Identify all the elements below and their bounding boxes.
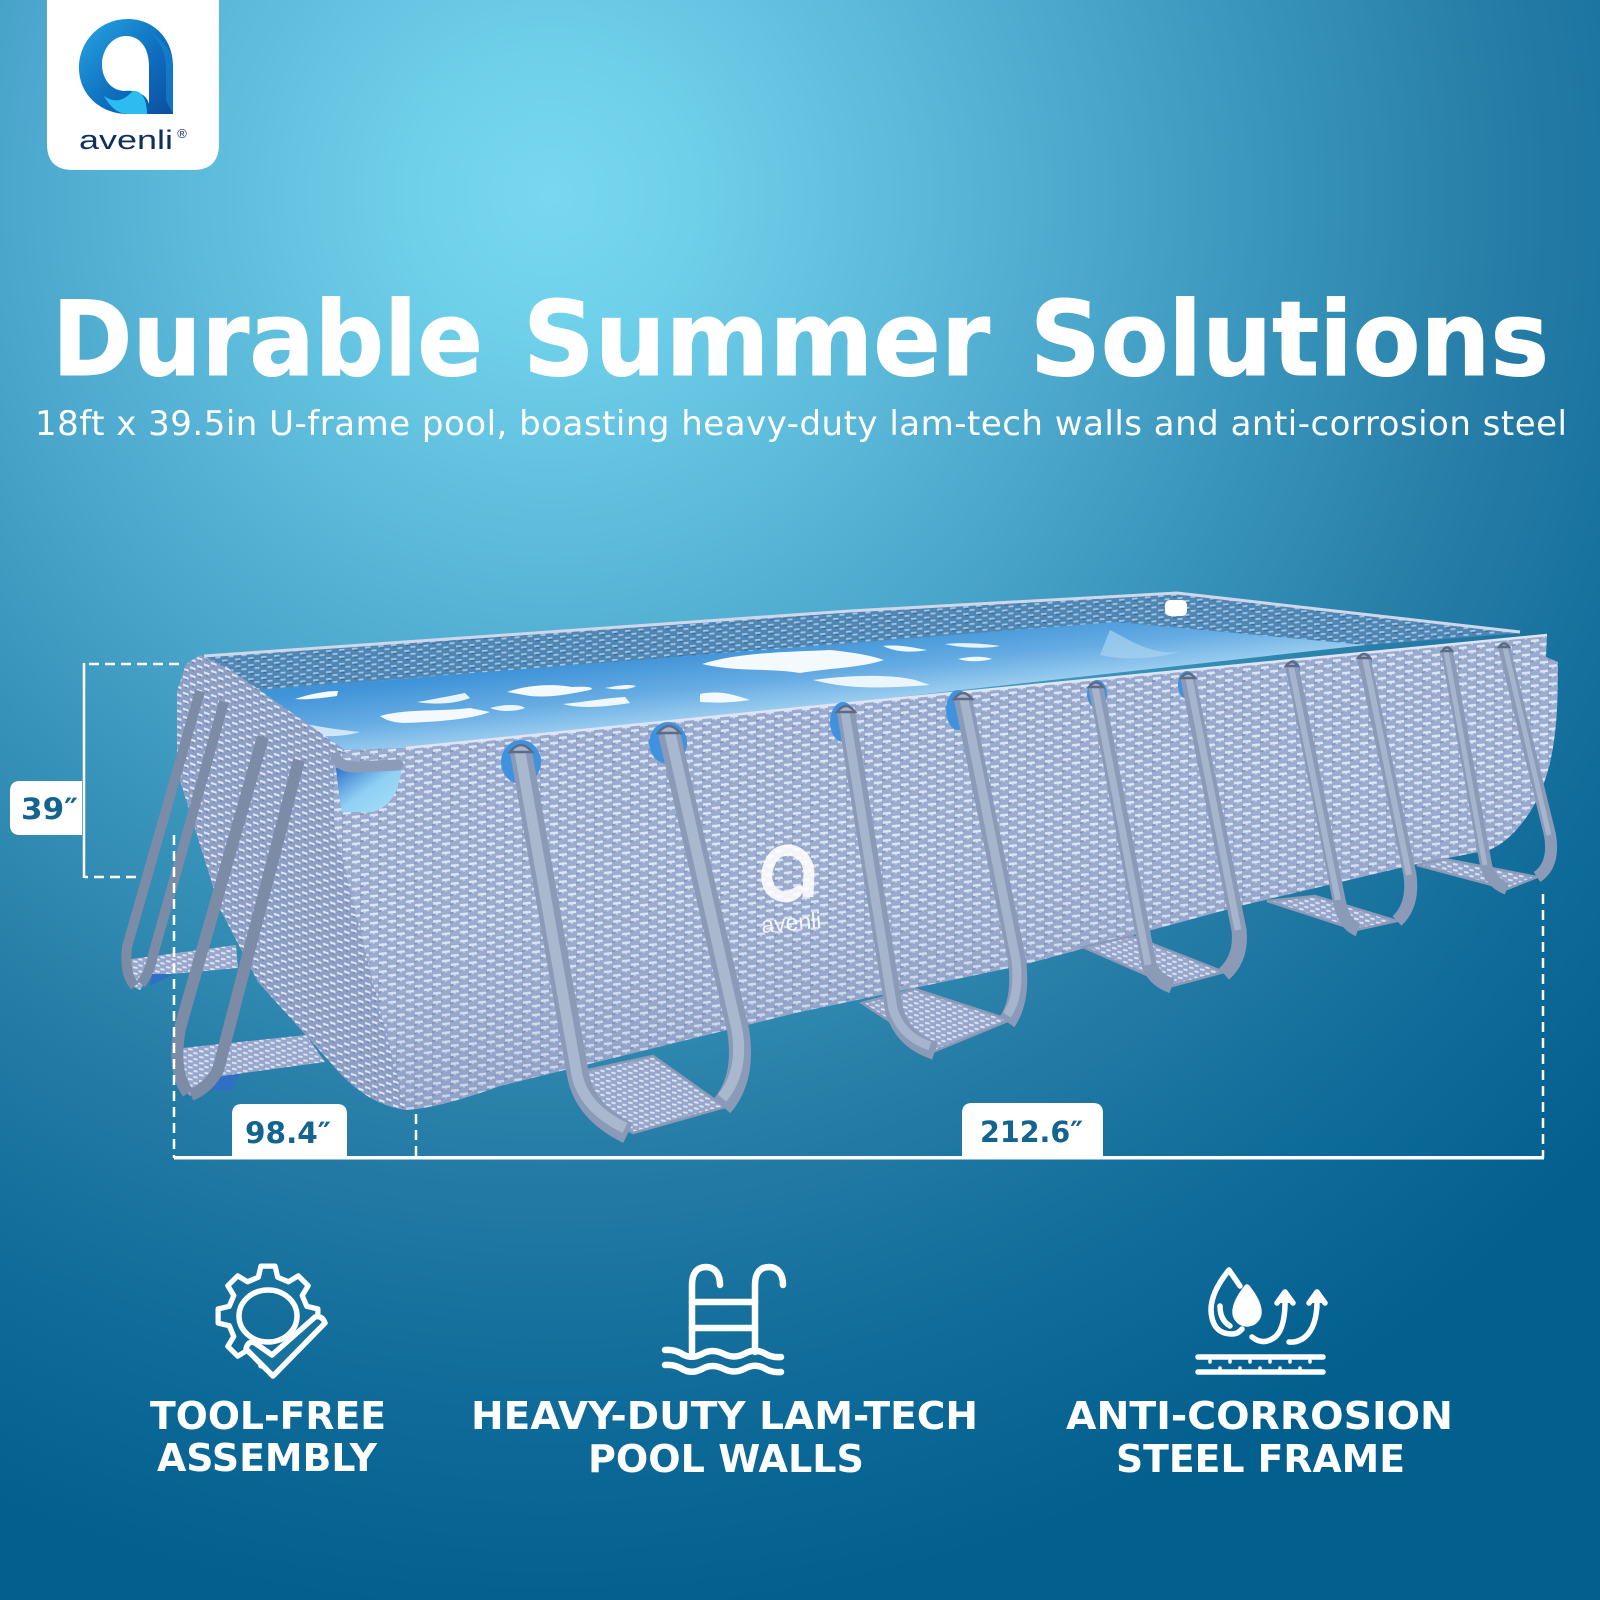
logo panel: [47, 0, 219, 170]
corner elbow pipe: [336, 758, 398, 767]
width and length dimension lines: [174, 835, 1544, 1160]
label: TOOL-FREE: [150, 1394, 386, 1438]
leg caps: [510, 644, 1509, 752]
height label: 39″: [21, 792, 78, 826]
corner cutout: [336, 766, 402, 812]
logo wordmark: avenli: [79, 125, 173, 155]
front leg 4: [1291, 658, 1411, 930]
wall logo: avenli: [760, 907, 822, 938]
icon: gear with check: [218, 1266, 325, 1376]
title: Durable: [52, 280, 483, 400]
front leg 5: [1446, 647, 1551, 889]
icon: water repellent: [1198, 1270, 1325, 1372]
leg foot plates: [569, 859, 1537, 1133]
left side wall: [177, 655, 406, 1110]
title: Summer: [523, 280, 990, 400]
water surface: [248, 622, 1366, 750]
feature: anti-corrosion steel frame: [1066, 1270, 1453, 1481]
wall logo: [760, 850, 822, 938]
label line 2: STEEL FRAME: [1116, 1437, 1405, 1481]
label line 2: ASSEMBLY: [157, 1436, 377, 1480]
length label: [962, 1103, 1103, 1156]
icon: avenli mark: [79, 19, 173, 114]
front leg 3: [1095, 678, 1239, 986]
height dimension: [10, 663, 179, 878]
registered mark: ®: [177, 126, 187, 141]
front leg 1: [520, 733, 740, 1133]
width label: 98.4″: [245, 1116, 331, 1150]
subtitle: 18ft x 39.5in U-frame pool, boasting heavy-duty lam-tech walls and anti-corrosion steel: [35, 404, 1567, 444]
title: [52, 280, 1549, 400]
label line 2: POOL WALLS: [588, 1437, 864, 1481]
feature: heavy-duty pool walls: [471, 1267, 978, 1481]
icon: pool ladder: [665, 1267, 783, 1372]
back top rim highlight: [204, 593, 1520, 656]
pool illustration: [124, 593, 1558, 1133]
label: ANTI-CORROSION: [1066, 1394, 1453, 1438]
front leg 2: [845, 699, 1018, 1051]
back and right interior walls: [200, 593, 1520, 691]
leg slots: [501, 653, 1372, 784]
side leg front: [173, 737, 325, 1096]
front wall: [333, 635, 1558, 1110]
label: HEAVY-DUTY LAM-TECH: [471, 1394, 978, 1438]
feature: tool-free assembly: [150, 1266, 386, 1480]
side leg rear: [124, 691, 238, 990]
length label: 212.6″: [980, 1115, 1083, 1149]
skimmer opening: [1165, 600, 1187, 616]
title: Solutions: [1030, 280, 1549, 400]
width label: [232, 1104, 347, 1156]
